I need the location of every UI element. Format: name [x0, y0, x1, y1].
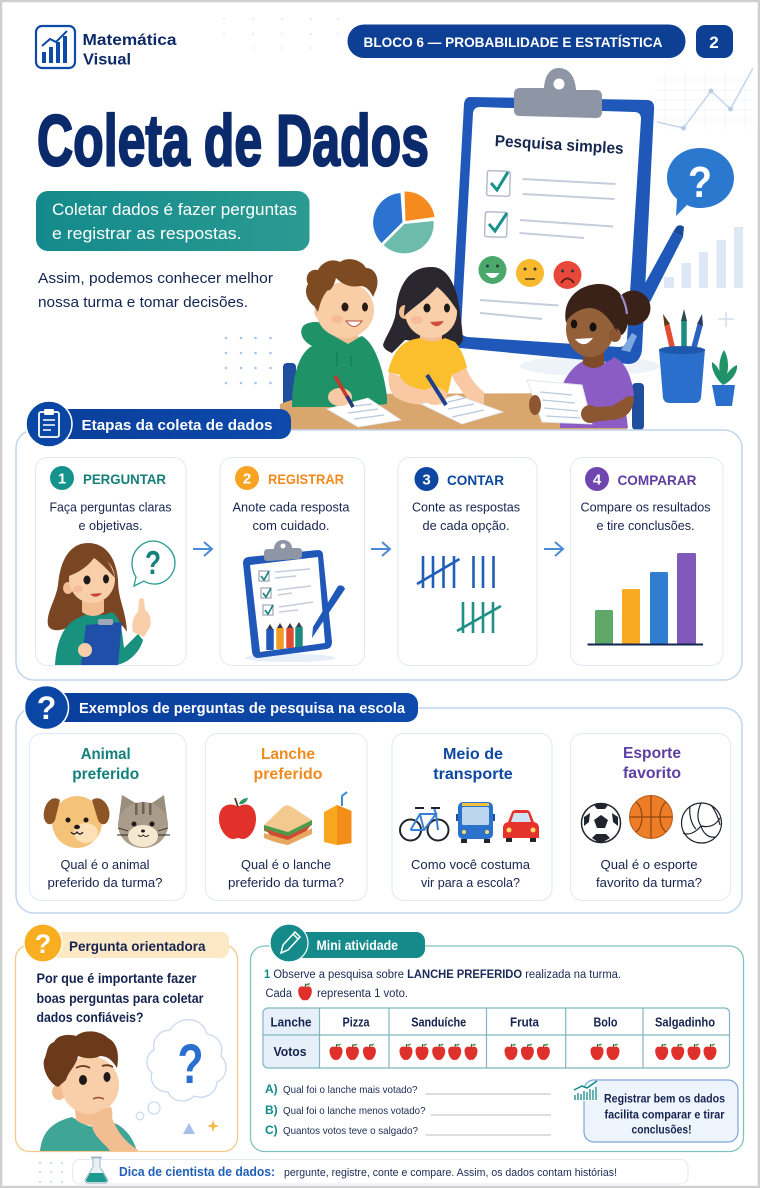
- block badge: [348, 24, 686, 58]
- title: Coleta de Dados: [37, 102, 429, 182]
- vote table: Votos: [274, 1045, 307, 1059]
- questions A B C: Qual foi o lanche mais votado?: [283, 1084, 418, 1096]
- step 4 card: comparar: [570, 458, 723, 666]
- card: animal preferido: preferido: [72, 766, 139, 783]
- apple votes: [330, 1044, 716, 1060]
- vote table: Bolo: [594, 1016, 618, 1030]
- questions A B C: C): [265, 1123, 278, 1137]
- step 3 card: contar: [398, 458, 537, 666]
- card: meio de transporte: Como você costuma: [411, 857, 531, 872]
- instructions: representa 1 voto.: [317, 988, 408, 1000]
- vote table: Sanduíche: [411, 1016, 466, 1030]
- step 4 card: comparar: Compare os resultados: [580, 500, 711, 514]
- step 1 card: perguntar: e objetivas.: [78, 518, 142, 533]
- instructions: 1 Observe a pesquisa sobre LANCHE PREFERIDO realizada na turma.: [264, 969, 621, 981]
- footer tip: [72, 1156, 688, 1184]
- heading banner: Mini atividade: [316, 938, 398, 953]
- card: animal preferido: preferido da turma?: [48, 875, 162, 890]
- questions A B C: A): [265, 1082, 278, 1096]
- icon: bus: [456, 802, 495, 843]
- definition box: Coletar dados é fazer perguntas: [52, 201, 297, 219]
- step 2 card: registrar: REGISTRAR: [268, 471, 344, 487]
- card: animal preferido: Animal: [81, 746, 131, 763]
- icon: cat: [117, 795, 170, 848]
- heading banner: ?: [35, 929, 51, 959]
- step 4 card: comparar: 4: [593, 472, 602, 488]
- boy in green hoodie: [292, 259, 387, 407]
- logo text: Matemática: [82, 32, 177, 49]
- thought bubble: ?: [178, 1032, 204, 1095]
- page number: 2: [709, 33, 719, 52]
- card: esporte favorito: favorito da turma?: [596, 875, 702, 890]
- table: [280, 393, 627, 430]
- panel: pergunta orientadora: [16, 924, 238, 1152]
- step 3 card: contar: Conte as respostas: [412, 500, 520, 514]
- arrow 2: [371, 542, 390, 556]
- panel: exemplos de perguntas: [16, 686, 742, 913]
- icon: pencil cup: [659, 309, 705, 403]
- card: meio de transporte: [392, 734, 552, 900]
- definition box: e registrar as respostas.: [52, 225, 242, 243]
- illustration: three children at table: [280, 259, 650, 430]
- card: esporte favorito: Qual é o esporte: [600, 857, 698, 872]
- logo text: [82, 32, 177, 68]
- step 4 card: comparar: e tire conclusões.: [596, 518, 694, 533]
- section banner: Exemplos de perguntas de pesquisa na escola: [79, 700, 406, 717]
- callout: registrar bem os dados: Registrar bem os dados: [604, 1094, 725, 1106]
- heading banner: [270, 924, 425, 962]
- panel: etapas da coleta de dados: [16, 401, 742, 680]
- step 3 card: contar: 3: [422, 472, 431, 488]
- card: animal preferido: [30, 734, 186, 900]
- block badge: BLOCO 6 — PROBABILIDADE E ESTATÍSTICA: [364, 34, 662, 50]
- questions A B C: Quantos votos teve o salgado?: [283, 1125, 418, 1137]
- icon: flask: [85, 1156, 108, 1183]
- section banner: [26, 401, 291, 447]
- illustration: girl pointing: [48, 541, 175, 665]
- step 4 card: comparar: COMPARAR: [618, 472, 696, 488]
- icon: bicycle: [400, 808, 448, 840]
- callout: registrar bem os dados: facilita comparar e tirar: [604, 1110, 725, 1122]
- callout: registrar bem os dados: conclusões!: [632, 1124, 692, 1136]
- step 1 card: perguntar: PERGUNTAR: [83, 471, 166, 487]
- guiding question text: boas perguntas para coletar: [36, 991, 204, 1006]
- definition box: [36, 191, 310, 251]
- card: esporte favorito: [570, 734, 730, 900]
- step 2 card: registrar: com cuidado.: [252, 518, 330, 533]
- illustration: girl pointing: ?: [145, 544, 161, 581]
- step 3 card: contar: de cada opção.: [422, 518, 510, 533]
- questions A B C: [265, 1082, 551, 1137]
- section banner: [24, 686, 418, 730]
- intro text: Assim, podemos conhecer melhor: [38, 270, 273, 287]
- icon: mini chart: [574, 1081, 597, 1101]
- icon: pie chart: [373, 191, 434, 253]
- bar chart: [588, 553, 703, 644]
- heading banner: Pergunta orientadora: [69, 938, 206, 954]
- step 1 card: perguntar: [36, 458, 186, 666]
- guiding question text: Por que é importante fazer: [36, 971, 197, 986]
- heading banner: [24, 924, 229, 962]
- section banner: ?: [37, 690, 56, 726]
- icon: basketball: [630, 796, 672, 838]
- vote table: Fruta: [510, 1016, 540, 1030]
- pens and hands: [328, 388, 352, 406]
- step 1 card: perguntar: Faça perguntas claras: [50, 500, 172, 514]
- card: esporte favorito: favorito: [623, 765, 681, 782]
- callout: registrar bem os dados: [574, 1080, 738, 1142]
- header dots decoration: [223, 18, 339, 49]
- step 2 card: registrar: [220, 458, 364, 666]
- papers on table: [327, 395, 503, 427]
- intro text: [38, 270, 273, 311]
- footer tip: Dica de cientista de dados:: [119, 1164, 275, 1179]
- instructions: Cada: [266, 988, 293, 1000]
- guiding question text: [36, 971, 204, 1025]
- card: lanche preferido: Lanche: [261, 746, 315, 763]
- girl in purple shirt: [560, 284, 650, 428]
- icon: soccer ball: [582, 803, 620, 842]
- illustration: thinking boy: [40, 1031, 138, 1151]
- card: lanche preferido: [206, 734, 367, 900]
- logo text: Visual: [83, 52, 131, 68]
- arrow 3: [544, 542, 563, 556]
- card: meio de transporte: vir para a escola?: [421, 875, 520, 890]
- girl in yellow shirt: [383, 267, 484, 405]
- illustration: clipboard with markers: [243, 540, 345, 662]
- icon: logo chart: [36, 26, 75, 68]
- vote table: Salgadinho: [655, 1016, 715, 1030]
- guiding question text: dados confiáveis?: [36, 1010, 144, 1025]
- icon: question bubble: [667, 148, 734, 216]
- card: esporte favorito: Esporte: [623, 745, 681, 762]
- icon: apple legend: [298, 983, 312, 1000]
- icon: pen: [621, 225, 684, 352]
- arrow 1: [193, 542, 212, 556]
- footer tip: pergunte, registre, conte e compare. Assim, os dados contam histórias!: [284, 1167, 617, 1179]
- thought bubble: [136, 1020, 226, 1120]
- icon: potted plant: [712, 350, 737, 406]
- step 1 card: perguntar: 1: [58, 470, 66, 488]
- panel: mini atividade: [250, 924, 744, 1152]
- card: meio de transporte: transporte: [433, 766, 513, 783]
- step 2 card: registrar: Anote cada resposta: [232, 500, 350, 514]
- card: meio de transporte: Meio de: [443, 746, 503, 763]
- icon: car: [503, 810, 539, 842]
- icon: sandwich: [264, 805, 312, 845]
- card: lanche preferido: Qual é o lanche: [241, 857, 331, 872]
- illustration: clipboard survey: [451, 68, 660, 376]
- questions A B C: B): [265, 1103, 278, 1117]
- card: animal preferido: Qual é o animal: [60, 857, 150, 872]
- vote table: Pizza: [342, 1016, 370, 1030]
- vote table: Lanche: [270, 1016, 312, 1030]
- vote table: [263, 1008, 730, 1068]
- icon: question bubble: ?: [688, 158, 712, 207]
- card: lanche preferido: preferido da turma?: [228, 875, 344, 890]
- tally marks: [417, 556, 501, 633]
- logo: [36, 26, 177, 68]
- background chart decoration: [655, 68, 755, 327]
- icon: dog: [44, 796, 110, 848]
- card: lanche preferido: preferido: [254, 766, 323, 783]
- section banner: Etapas da coleta de dados: [82, 417, 272, 434]
- illustration: clipboard survey: Pesquisa simples: [494, 133, 624, 158]
- instructions: [264, 969, 621, 1000]
- icon: juice box: [324, 792, 352, 845]
- held paper: [527, 380, 592, 424]
- page number: [696, 25, 733, 58]
- questions A B C: Qual foi o lanche menos votado?: [283, 1105, 426, 1117]
- icon: volleyball: [682, 803, 722, 843]
- step 3 card: contar: CONTAR: [447, 472, 504, 488]
- icon: apple: [219, 798, 256, 839]
- intro text: nossa turma e tomar decisões.: [38, 294, 248, 311]
- step 2 card: registrar: 2: [243, 470, 251, 488]
